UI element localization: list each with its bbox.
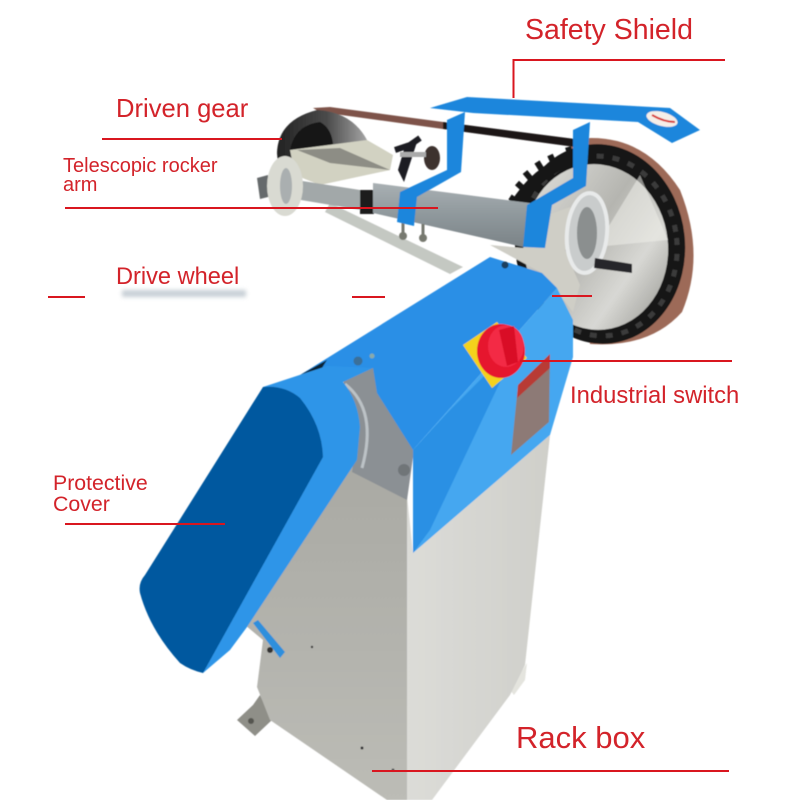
safety shield — [397, 97, 700, 248]
rocker arm bracket — [290, 138, 440, 185]
protective cover — [140, 366, 373, 673]
driven gear — [277, 110, 367, 165]
label: telescopic rocker arm: arm — [63, 174, 97, 196]
label: safety shield — [514, 14, 725, 98]
label: drive wheel — [48, 264, 592, 297]
rack box cabinet — [237, 435, 550, 800]
gear casting — [490, 207, 580, 312]
telescopic rocker arm — [257, 156, 530, 247]
label: safety shield: Safety Shield — [525, 14, 693, 46]
sanding belt — [313, 107, 575, 147]
label: rack box: Rack box — [516, 720, 646, 755]
hand wheel — [564, 191, 632, 275]
label: protective cover: Protective — [53, 471, 148, 495]
machine illustration — [140, 97, 700, 800]
label: drive wheel: Drive wheel — [116, 264, 239, 290]
lower belt bar — [325, 203, 463, 274]
label: telescopic rocker arm: Telescopic rocker — [63, 155, 218, 177]
label: industrial switch: Industrial switch — [570, 382, 739, 409]
abrasive wheel — [505, 136, 695, 352]
wheel teeth — [510, 147, 575, 207]
industrial switch — [463, 322, 527, 388]
label: telescopic rocker arm — [63, 155, 438, 208]
label: protective cover — [53, 471, 225, 524]
left bracket — [397, 112, 465, 226]
right bracket — [523, 122, 590, 248]
blue housing — [300, 257, 573, 553]
label: protective cover: Cover — [53, 492, 110, 516]
label: driven gear: Driven gear — [116, 95, 249, 123]
motor casting — [343, 366, 414, 500]
warning label plate — [511, 354, 550, 455]
